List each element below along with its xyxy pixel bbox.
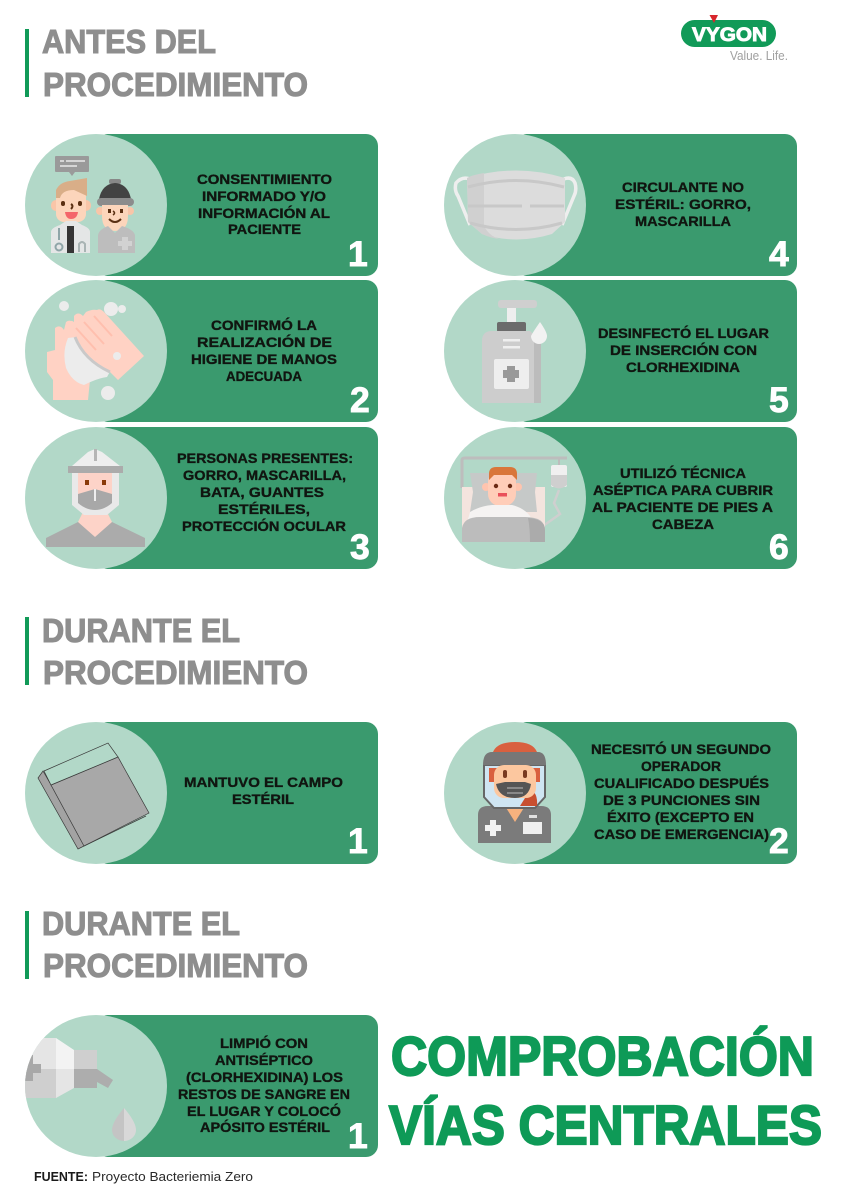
- text: segundo operador: OPERADOR: [641, 758, 721, 774]
- text: higiene: ADECUADA: [226, 368, 302, 384]
- text: segundo operador: CASO DE EMERGENCIA): [594, 826, 769, 842]
- panel: durante step 2 segundo operador: [444, 722, 797, 864]
- text: desinfectó: [598, 324, 769, 375]
- panel: step 5 desinfectó: [444, 280, 797, 422]
- icon: patient in bed: [462, 458, 567, 542]
- text: segundo operador: NECESITÓ UN SEGUNDO: [591, 740, 771, 757]
- text: técnica aséptica: ASÉPTICA PARA CUBRIR: [593, 482, 773, 498]
- text: consentimiento: CONSENTIMIENTO: [197, 171, 332, 187]
- text: desinfectó: DESINFECTÓ EL LUGAR: [598, 324, 769, 341]
- text: segundo operador: ÉXITO (EXCEPTO EN: [607, 809, 754, 825]
- panel: step 4 circulante: [444, 134, 797, 276]
- heading: durante el procedimiento: PROCEDIMIENTO: [43, 654, 308, 691]
- text: limpió: [178, 1034, 350, 1135]
- heading: antes del procedimiento: PROCEDIMIENTO: [43, 66, 308, 103]
- text: desinfectó: CLORHEXIDINA: [626, 359, 740, 375]
- number 5: 5: [769, 380, 789, 420]
- logo: Vygon: [681, 15, 788, 63]
- icon: antiseptic dropper: [25, 1038, 136, 1141]
- number 1: 1: [348, 1116, 368, 1156]
- heading: durante el procedimiento (segundo): [25, 905, 308, 984]
- heading: durante el procedimiento: DURANTE EL: [42, 612, 240, 649]
- icon: sanitizer bottle: [482, 300, 547, 403]
- text: circulante: CIRCULANTE NO: [622, 179, 744, 195]
- text: personas presentes: PROTECCIÓN OCULAR: [182, 517, 346, 534]
- text: campo estéril: ESTÉRIL: [232, 791, 294, 807]
- logo: Vygon: Value. Life.: [730, 48, 788, 63]
- text: personas presentes: PERSONAS PRESENTES:: [177, 450, 353, 466]
- text: consentimiento: INFORMACIÓN AL: [198, 204, 330, 221]
- panel: step 6 técnica aséptica: [444, 427, 797, 569]
- text: limpió: RESTOS DE SANGRE EN: [178, 1086, 350, 1102]
- icon: surgical mask: [455, 170, 576, 240]
- text: circulante: MASCARILLA: [635, 213, 731, 229]
- text: personas presentes: BATA, GUANTES: [200, 484, 324, 500]
- number 2: 2: [350, 380, 370, 420]
- text: limpió: ANTISÉPTICO: [215, 1052, 313, 1068]
- number 6: 6: [769, 527, 789, 567]
- title: comprobación vías centrales: [389, 1025, 822, 1156]
- text: segundo operador: [591, 740, 771, 842]
- text: consentimiento: INFORMADO Y/O: [202, 188, 326, 204]
- icon: protected person: [46, 449, 145, 547]
- text: campo estéril: [184, 774, 343, 807]
- icon: operator with face shield: [478, 742, 551, 843]
- number 2: 2: [769, 821, 789, 861]
- text: circulante: ESTÉRIL: GORRO,: [615, 196, 751, 212]
- number 1: 1: [348, 234, 368, 274]
- text: personas presentes: [177, 450, 353, 534]
- text: segundo operador: CUALIFICADO DESPUÉS: [594, 775, 769, 791]
- text: segundo operador: DE 3 PUNCIONES SIN: [603, 792, 760, 808]
- source note: Proyecto Bacteriemia Zero: [92, 1170, 253, 1184]
- number 3: 3: [350, 527, 370, 567]
- text: limpió: (CLORHEXIDINA) LOS: [186, 1069, 343, 1085]
- text: técnica aséptica: UTILIZÓ TÉCNICA: [620, 464, 746, 481]
- title: comprobación vías centrales: COMPROBACIÓN: [391, 1025, 814, 1087]
- number 1: 1: [348, 821, 368, 861]
- text: circulante: [615, 179, 751, 229]
- text: higiene: HIGIENE DE MANOS: [191, 351, 337, 367]
- source note: FUENTE:: [34, 1170, 88, 1184]
- logo: Vygon: VYGON: [692, 24, 767, 46]
- text: higiene: CONFIRMÓ LA: [211, 316, 317, 333]
- text: personas presentes: ESTÉRILES,: [218, 501, 310, 517]
- text: limpió: LIMPIÓ CON: [220, 1034, 308, 1051]
- text: campo estéril: MANTUVO EL CAMPO: [184, 774, 343, 790]
- number 4: 4: [769, 234, 789, 274]
- text: técnica aséptica: [592, 464, 773, 532]
- heading: durante el procedimiento (segundo): PROCEDIMIENTO: [43, 947, 308, 984]
- text: desinfectó: DE INSERCIÓN CON: [610, 341, 757, 358]
- panel: step 2 higiene de manos: [25, 280, 378, 422]
- source note: [34, 1170, 253, 1184]
- panel: step 3 personas presentes: [25, 427, 378, 569]
- icon: washing hands: [47, 301, 144, 400]
- text: técnica aséptica: CABEZA: [652, 516, 714, 532]
- icon: sterile field drape: [38, 743, 149, 849]
- text: higiene: REALIZACIÓN DE: [197, 333, 332, 350]
- text: personas presentes: GORRO, MASCARILLA,: [183, 467, 346, 483]
- text: técnica aséptica: AL PACIENTE DE PIES A: [592, 499, 773, 515]
- heading: antes del procedimiento: ANTES DEL: [42, 23, 216, 60]
- heading: durante el procedimiento: [25, 612, 308, 691]
- text: limpió: EL LUGAR Y COLOCÓ: [187, 1102, 341, 1119]
- heading: antes del procedimiento: [25, 23, 308, 103]
- panel: step 1 consentimiento: [25, 134, 378, 276]
- panel: durante step 1 campo estéril: [25, 722, 378, 864]
- icon: doctor and patient: [51, 156, 135, 253]
- text: consentimiento: [197, 171, 332, 237]
- text: limpió: APÓSITO ESTÉRIL: [200, 1118, 330, 1135]
- panel: limpió con antiséptico: [25, 1015, 378, 1157]
- text: consentimiento: PACIENTE: [228, 221, 301, 237]
- text: higiene: [191, 316, 337, 384]
- heading: durante el procedimiento (segundo): DURANTE EL: [42, 905, 240, 942]
